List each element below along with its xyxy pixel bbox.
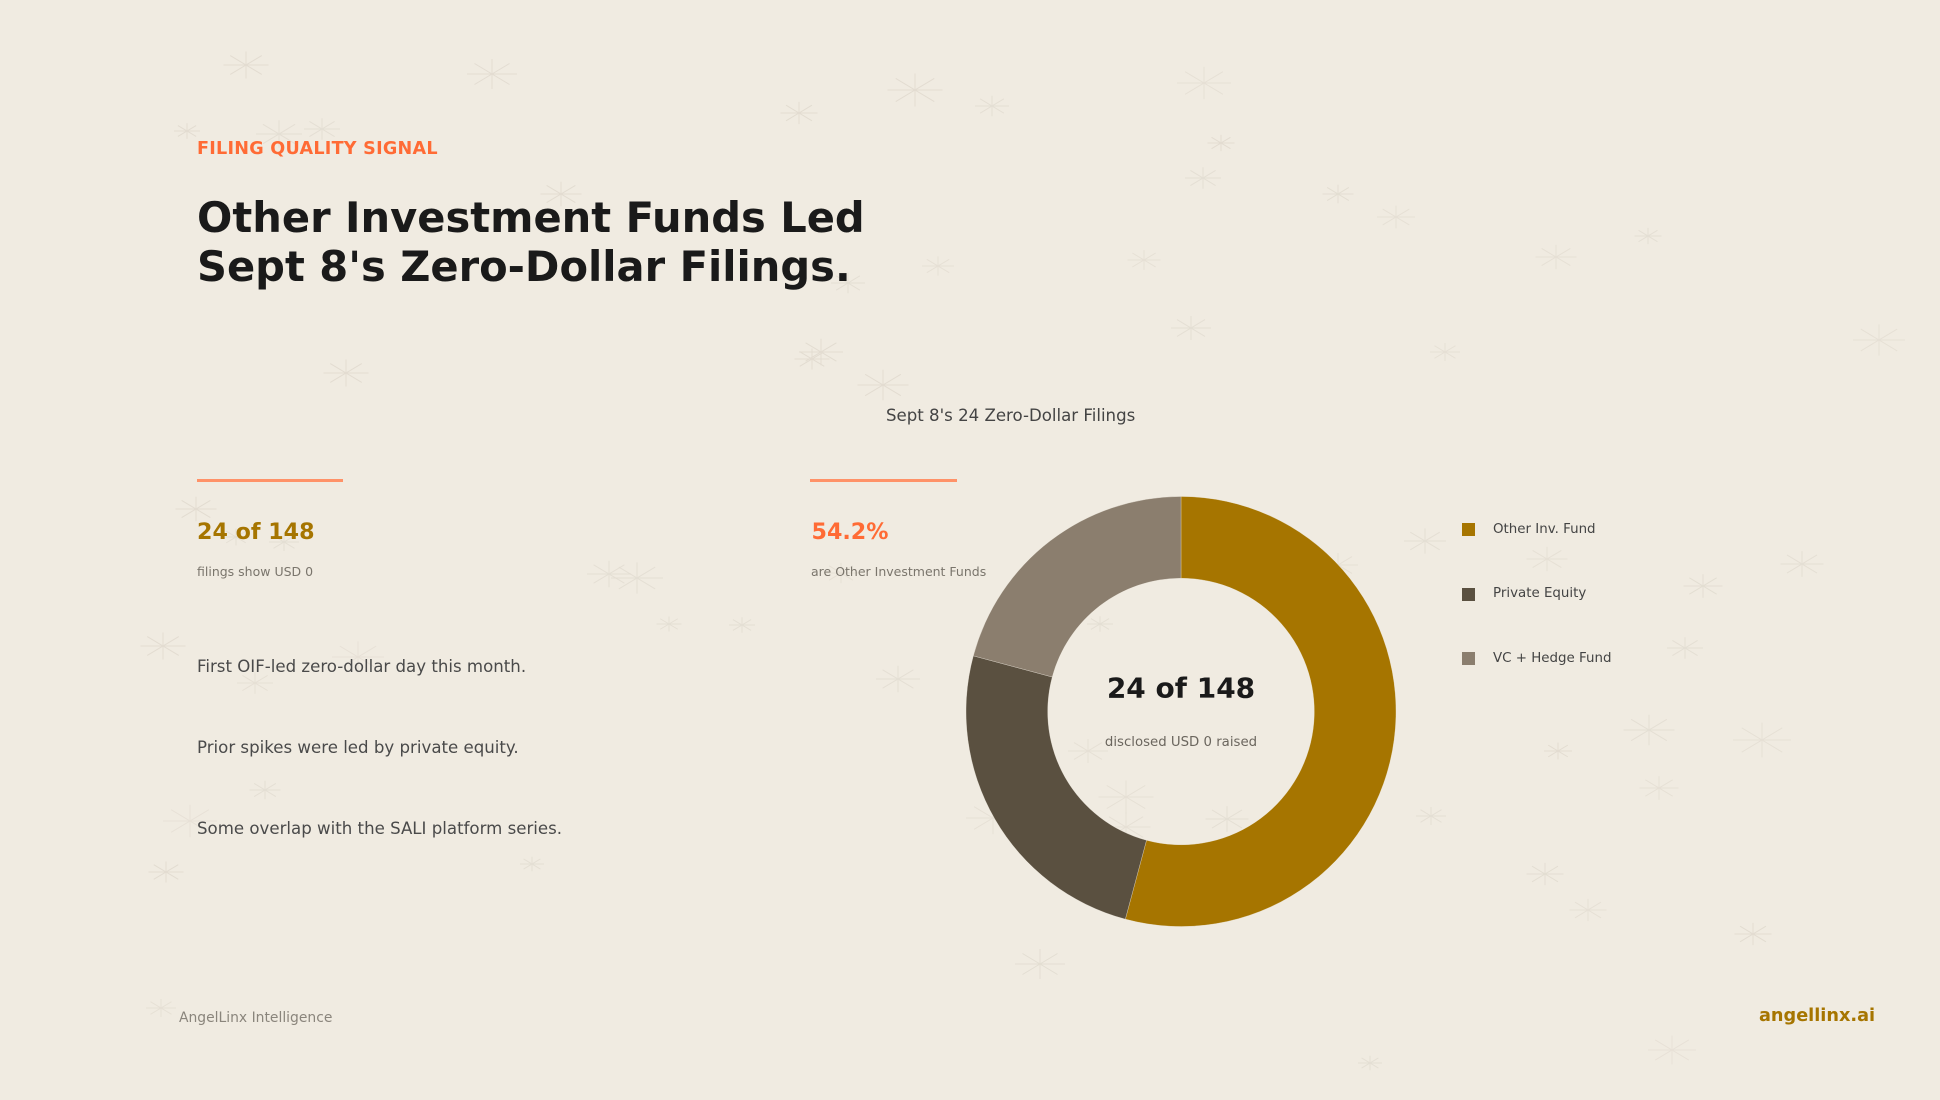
point 3: Some overlap with the SALI platform series.: [197, 819, 562, 838]
chart title: Sept 8's 24 Zero-Dollar Filings: [886, 406, 1135, 425]
footer source: AngelLinx Intelligence: [179, 1010, 332, 1026]
legend item: VC + Hedge Fund: VC + Hedge Fund: [1493, 651, 1612, 666]
donut centre value: 24 of 148: [1107, 672, 1255, 704]
segment: VC + Hedge Fund: [973, 496, 1181, 677]
stat 2 caption: are Other Investment Funds: [811, 564, 986, 579]
panel: stat 24 of 148: [197, 479, 343, 579]
legend: [1462, 522, 1612, 666]
title: Other Investment Funds Led: [197, 193, 865, 242]
stat 2 value: 54.2%: [812, 519, 888, 545]
stat 2 accent rule: [810, 479, 957, 482]
point 2: Prior spikes were led by private equity.: [197, 738, 519, 757]
title: Sept 8's Zero-Dollar Filings.: [197, 242, 851, 291]
segment: Other Inv. Fund: [1125, 496, 1396, 926]
footer brand: angellinx.ai: [1759, 1006, 1875, 1026]
segment: Private Equity: [966, 656, 1146, 919]
panel: stat 54.2%: [810, 479, 986, 579]
donut centre caption: disclosed USD 0 raised: [1105, 735, 1257, 750]
donut chart: [966, 496, 1396, 926]
legend item: Other Inv. Fund: Other Inv. Fund: [1493, 522, 1596, 537]
stat 1 caption: filings show USD 0: [197, 564, 313, 579]
stat 1 value: 24 of 148: [197, 519, 315, 545]
stat 1 accent rule: [197, 479, 343, 482]
text block: key points: [197, 657, 562, 838]
eyebrow label: FILING QUALITY SIGNAL: [197, 139, 438, 159]
point 1: First OIF-led zero-dollar day this month.: [197, 657, 526, 676]
legend item: Private Equity: Private Equity: [1493, 586, 1586, 601]
